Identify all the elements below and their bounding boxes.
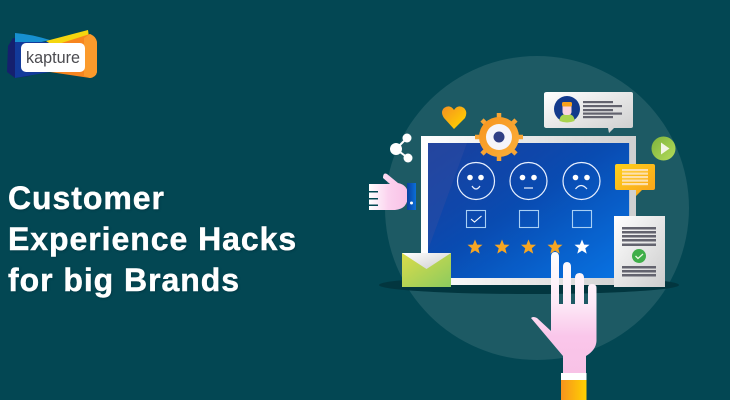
- icon: share: [390, 134, 412, 162]
- logo: kapture: [7, 30, 97, 78]
- monitor shadow: [379, 276, 679, 294]
- title: Experience Hacks: [8, 221, 297, 257]
- logo wordmark: kapture: [26, 49, 80, 67]
- title: Customer: [8, 180, 165, 216]
- yellow note bubble: [615, 164, 655, 196]
- hand pointing left with cuff: [369, 174, 416, 210]
- icon: play button: [652, 136, 676, 160]
- checkboxes: [466, 210, 592, 228]
- smiley faces: [458, 162, 600, 200]
- hand pointing at screen: [531, 252, 596, 400]
- sad face: [563, 162, 600, 200]
- shirt cuff: [561, 373, 586, 380]
- screen: [428, 143, 629, 278]
- empty box: [572, 210, 592, 228]
- rating stars: [468, 240, 590, 254]
- empty box: [520, 210, 538, 228]
- sleeve: [561, 380, 586, 400]
- bubble text lines: [583, 101, 622, 118]
- checked box: [466, 210, 486, 228]
- title: for big Brands: [8, 262, 240, 298]
- icon: heart: [442, 106, 466, 129]
- icon: gear with eye: [475, 113, 523, 161]
- neutral face: [510, 162, 547, 200]
- background circle: [385, 56, 689, 360]
- monitor: [421, 136, 636, 285]
- document with check: [614, 216, 665, 287]
- happy face: [458, 162, 494, 200]
- envelope: [402, 253, 451, 287]
- title: [8, 180, 297, 298]
- avatar: [554, 96, 580, 122]
- logo plate: [21, 43, 85, 72]
- speech bubble with avatar: [544, 92, 633, 133]
